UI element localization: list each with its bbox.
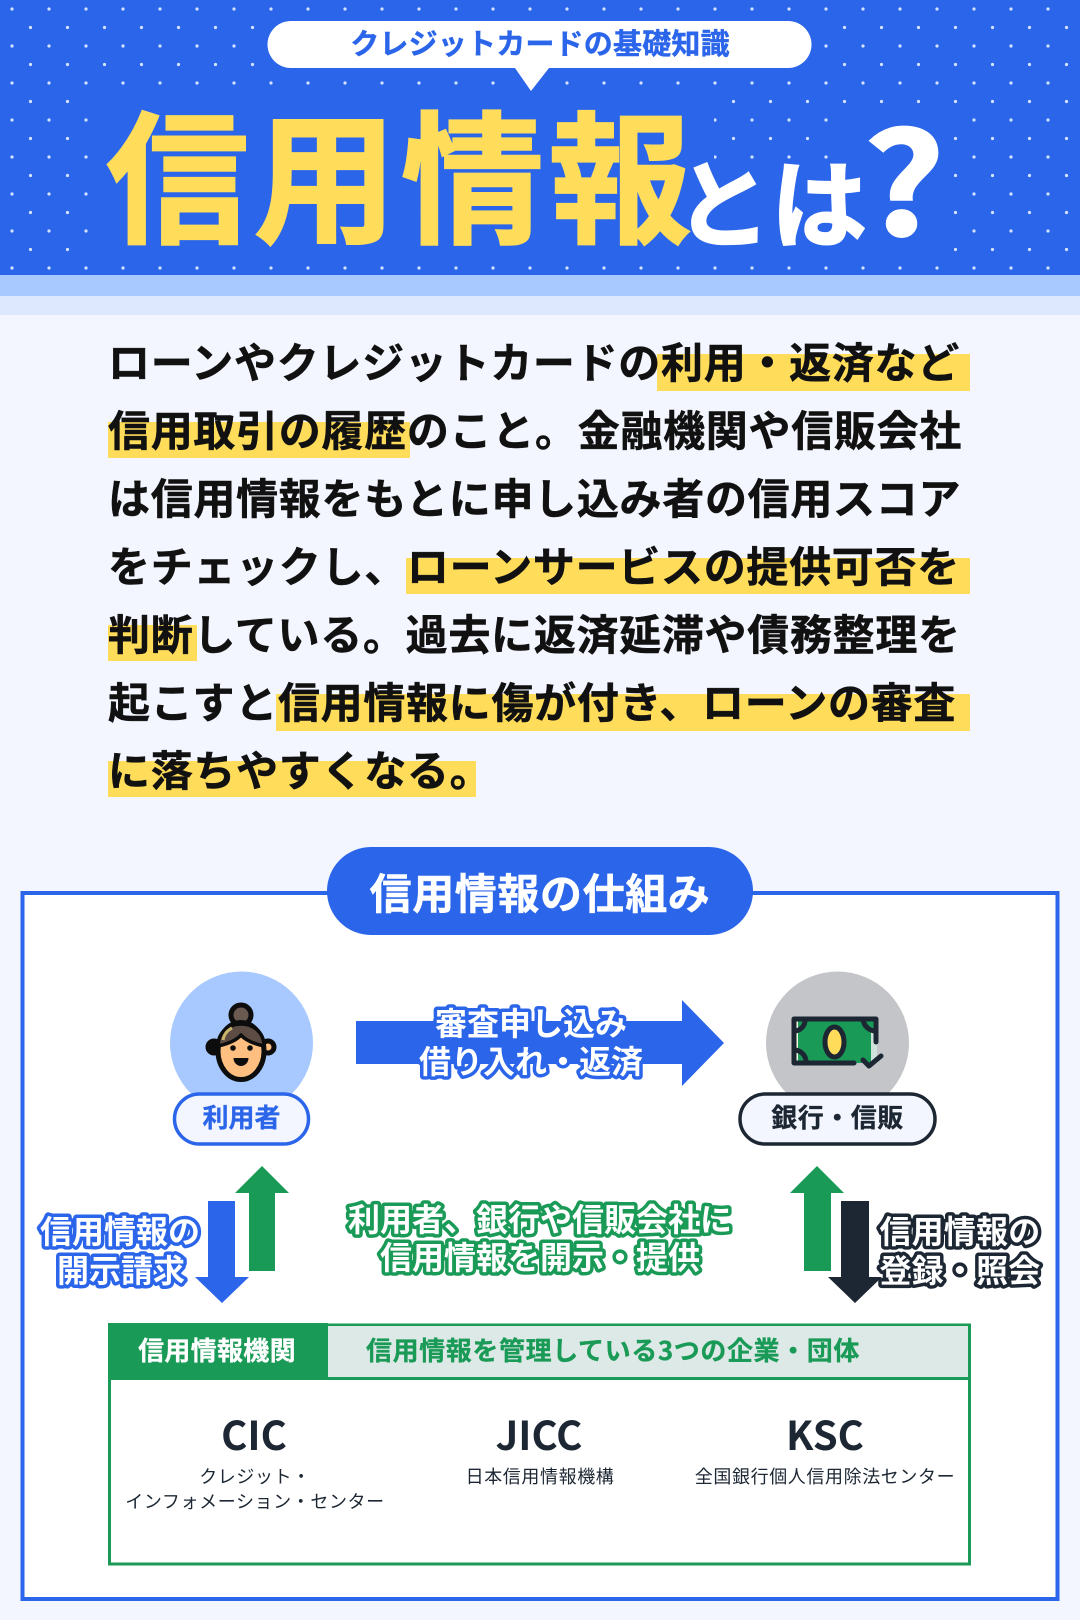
title: 信用情報 (106, 67, 696, 274)
bureau: CIC: CIC (221, 1404, 287, 1462)
arrow: user to bank: 審査申し込み (435, 999, 627, 1045)
title: とは (675, 129, 867, 268)
arrow: user to bank: 借り入れ・返済 (419, 1037, 643, 1083)
panel: credit information mechanism (22, 847, 1058, 1599)
label: bank: 銀行・信販 (771, 1098, 904, 1135)
title: ? (863, 74, 945, 276)
label: disclosure request (40, 1207, 200, 1292)
bureau: CIC (125, 1404, 385, 1514)
bureau: JICC: 日本信用情報機構 (466, 1463, 614, 1489)
bureau: JICC: JICC (496, 1404, 582, 1462)
bureau: JICC (466, 1404, 614, 1489)
speech bubble: category label: クレジットカードの基礎知識 (350, 21, 730, 63)
actor: bank (740, 972, 935, 1144)
bureau: CIC: クレジット・ (199, 1463, 311, 1489)
label: provide information: 信用情報を開示・提供 (380, 1233, 700, 1279)
label: user (174, 1094, 308, 1144)
arrow: user to bank (356, 999, 724, 1086)
explanation text block (108, 330, 970, 799)
explanation text block: をチェックし、ローンサービスの提供可否を (108, 534, 960, 595)
arrow: disclosure up left (235, 1166, 289, 1271)
panel heading: 信用情報の仕組み (370, 861, 710, 922)
label: register and inquire: 信用情報の (879, 1207, 1041, 1253)
label: register and inquire (879, 1207, 1041, 1292)
label: provide information (348, 1195, 732, 1279)
arrow: disclosure request down (195, 1201, 249, 1303)
panel: credit bureaus (108, 1323, 971, 1564)
explanation text block: は信用情報をもとに申し込み者の信用スコア (108, 466, 961, 527)
panel heading (327, 847, 753, 935)
bureau: CIC: インフォメーション・センター (125, 1488, 385, 1514)
label: register and inquire: 登録・照会 (879, 1246, 1041, 1292)
explanation text block: 信用取引の履歴のこと。金融機関や信販会社 (108, 398, 962, 459)
bureaus heading: 信用情報機関 (138, 1331, 296, 1368)
bureau: KSC: 全国銀行個人信用除法センター (695, 1463, 955, 1489)
speech bubble: category label (268, 21, 812, 91)
title (106, 67, 945, 276)
arrow: disclosure up right (790, 1166, 844, 1271)
label: disclosure request: 開示請求 (57, 1246, 185, 1292)
label: bank (740, 1094, 935, 1144)
label: provide information: 利用者、銀行や信販会社に (348, 1195, 732, 1241)
bureaus description: 信用情報を管理している3つの企業・団体 (366, 1331, 860, 1368)
header banner (0, 0, 1080, 315)
explanation text block: に落ちやすくなる。 (108, 738, 492, 799)
explanation text block: ローンやクレジットカードの利用・返済など (108, 330, 960, 391)
explanation text block: 起こすと信用情報に傷が付き、ローンの審査 (108, 670, 956, 731)
actor: user (170, 972, 313, 1144)
bureau: KSC: KSC (786, 1404, 864, 1462)
label: user: 利用者 (202, 1098, 281, 1135)
icon: banknote with check (794, 1019, 881, 1066)
icon: woman (208, 1005, 274, 1080)
label: disclosure request: 信用情報の (40, 1207, 200, 1253)
bureau: KSC (695, 1404, 955, 1489)
explanation text block: 判断している。過去に返済延滞や債務整理を (108, 602, 961, 663)
arrow: registration down (828, 1201, 882, 1303)
